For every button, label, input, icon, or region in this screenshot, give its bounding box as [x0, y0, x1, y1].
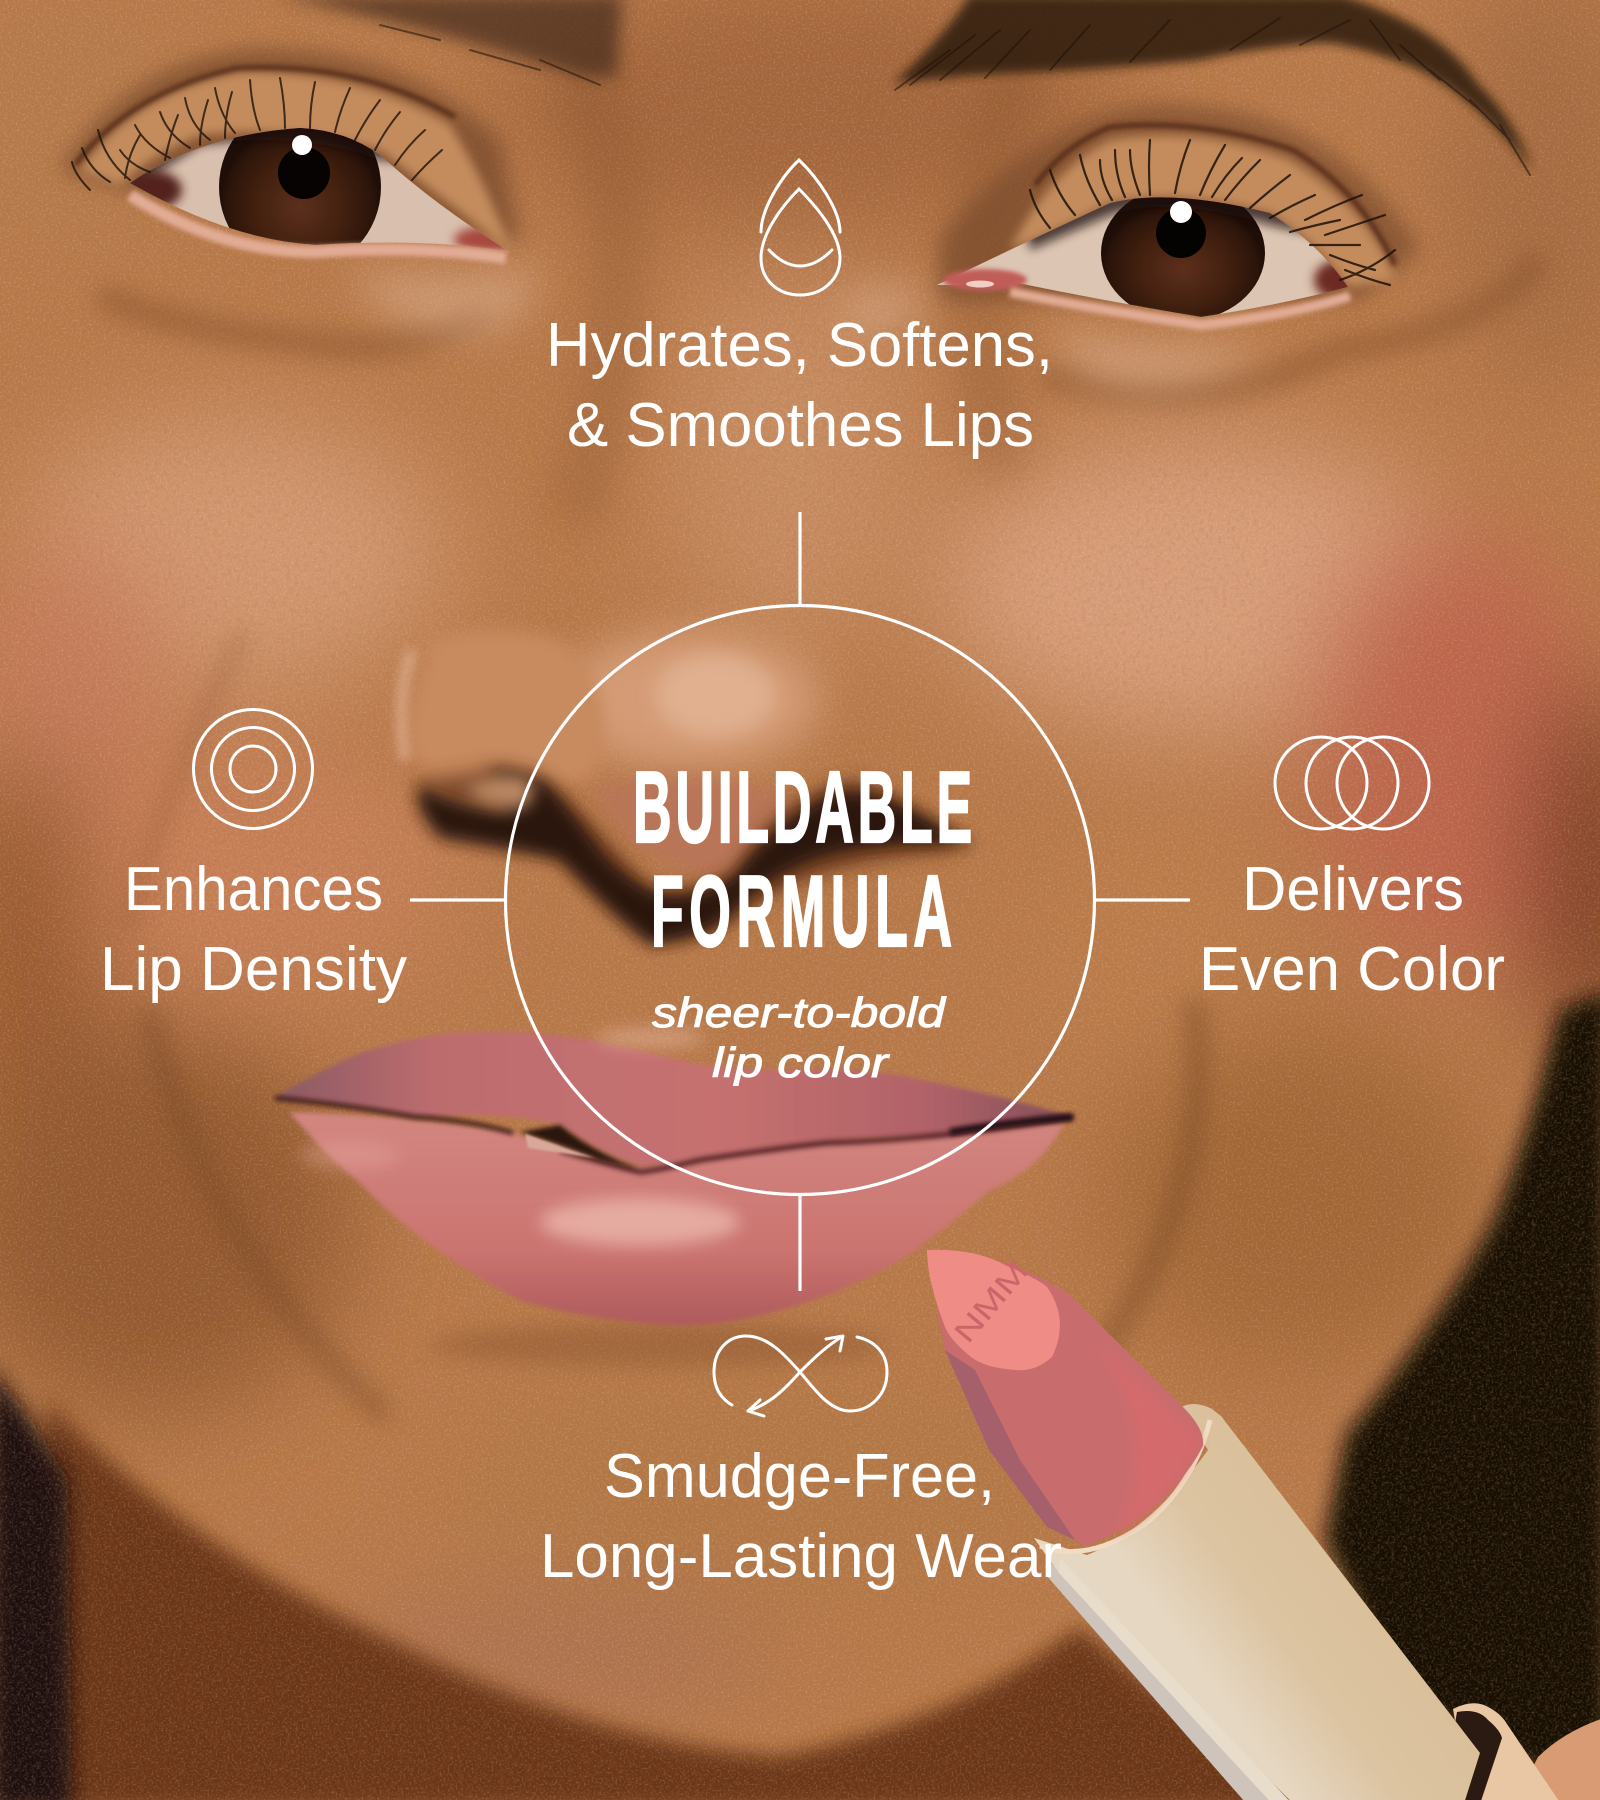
- finger: [1511, 1716, 1600, 1800]
- text: hydrates: [546, 311, 1053, 460]
- icon: water drop: [761, 160, 840, 295]
- left eye: [60, 50, 522, 271]
- subtitle: sheer-to-bold lip color: sheer-to-bold: [652, 989, 947, 1036]
- text: enhances: Enhances: [124, 855, 383, 924]
- lipstick bullet: NMM: [948, 1255, 1035, 1349]
- text: enhances: [100, 855, 407, 1004]
- right eye: [937, 105, 1420, 325]
- icon: infinity arrows: [714, 1336, 887, 1416]
- text: smudge free: [540, 1442, 1062, 1591]
- text: delivers: Even Color: [1199, 935, 1505, 1004]
- title: buildable formula: [633, 752, 972, 968]
- undereye highlights: [350, 265, 1270, 388]
- text: delivers: [1199, 855, 1505, 1004]
- dark hair left: [0, 1365, 72, 1800]
- text: smudge free: Long-Lasting Wear: [540, 1522, 1062, 1591]
- folds and undereye creases: [110, 90, 1532, 1410]
- dark hair right: [1325, 990, 1600, 1800]
- lipstick tube: [1034, 1404, 1565, 1800]
- text: delivers: Delivers: [1242, 855, 1464, 924]
- text: enhances: Lip Density: [100, 935, 407, 1004]
- text: hydrates: & Smoothes Lips: [567, 391, 1034, 460]
- nose: [401, 630, 975, 945]
- eyebrows: [277, 0, 1532, 175]
- title: buildable formula: FORMULA: [651, 856, 952, 968]
- connector lines and main circle: [410, 512, 1190, 1291]
- text: smudge free: Smudge-Free,: [604, 1442, 995, 1511]
- lipstick bullet: [927, 1250, 1203, 1546]
- subtitle: sheer-to-bold lip color: [652, 989, 947, 1086]
- icon: concentric circles: [194, 710, 312, 828]
- lips: [275, 1028, 1073, 1367]
- text: hydrates: Hydrates, Softens,: [546, 311, 1053, 380]
- neck and jaw shadow: [46, 1400, 1300, 1800]
- icon: overlapping circles: [1275, 737, 1429, 829]
- subtitle: sheer-to-bold lip color: lip color: [712, 1039, 890, 1086]
- title: buildable formula: BUILDABLE: [633, 752, 972, 864]
